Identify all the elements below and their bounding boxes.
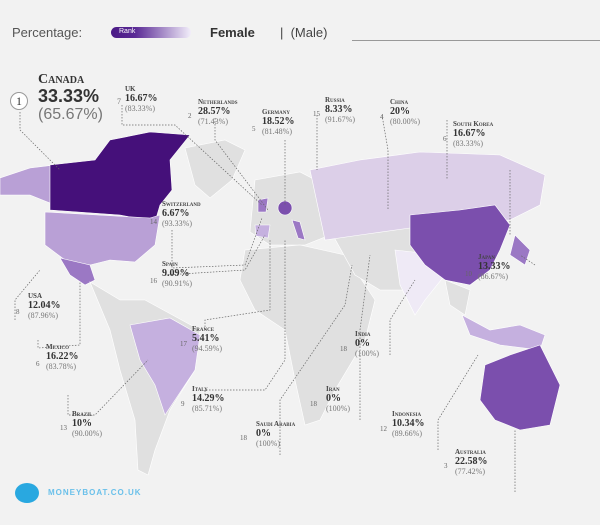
legend: Percentage:	[12, 25, 82, 40]
label: Brazil: 10%	[72, 418, 92, 429]
legend: | (Male)	[280, 25, 327, 40]
India	[395, 250, 445, 315]
text: 3	[444, 462, 448, 470]
text: 18	[340, 345, 347, 353]
label: France: (94.59%)	[192, 344, 222, 353]
Australia	[480, 345, 560, 430]
label: Canada: 1	[16, 94, 22, 108]
label: Germany: (81.48%)	[262, 127, 292, 136]
label: Switzerland	[162, 200, 201, 228]
label: India: (100%)	[355, 349, 379, 358]
label: Brazil	[72, 410, 102, 438]
text: 2	[188, 112, 192, 120]
label: Germany: 18.52%	[262, 116, 294, 127]
label: Russia	[325, 96, 355, 124]
label: Iran: 0%	[326, 393, 341, 404]
text: 14	[150, 218, 157, 226]
label: France	[192, 325, 222, 353]
label: Iran: Iran	[326, 385, 340, 393]
label: Iran	[326, 385, 350, 413]
label: Mexico: 16.22%	[46, 351, 78, 362]
label: China	[390, 98, 420, 126]
text: 5	[252, 125, 256, 133]
text: 15	[313, 110, 320, 118]
label: Switzerland: 6.67%	[162, 208, 190, 219]
label: Switzerland: Switzerland	[162, 200, 201, 208]
Russia	[310, 152, 545, 240]
label: China: 20%	[390, 106, 410, 117]
label: Italy: (85.71%)	[192, 404, 222, 413]
label: Japan: 13.33%	[478, 261, 510, 272]
label: Canada: Canada	[38, 72, 84, 87]
label: Netherlands: Netherlands	[198, 98, 238, 106]
label: South Korea	[453, 120, 494, 148]
Spain	[255, 225, 270, 238]
label: Russia: (91.67%)	[325, 115, 355, 124]
label: Netherlands: (71.43%)	[198, 117, 228, 126]
label: South Korea: South Korea	[453, 120, 493, 128]
label: India: 0%	[355, 338, 370, 349]
label: UK: UK	[125, 85, 136, 93]
Japan	[510, 235, 530, 265]
Middle East / Asia grey	[330, 225, 440, 290]
label: UK: 16.67%	[125, 93, 158, 104]
text: 6	[443, 135, 446, 143]
label: Brazil: Brazil	[72, 410, 93, 418]
label: South Korea: 16.67%	[453, 128, 486, 139]
UK	[258, 198, 268, 212]
label: Russia: 8.33%	[325, 104, 352, 115]
label: India	[355, 330, 379, 358]
SE Asia grey	[445, 280, 470, 315]
label: Netherlands	[198, 98, 238, 126]
label: Russia: Russia	[325, 96, 345, 104]
Greenland	[185, 140, 245, 198]
legend: Female	[210, 25, 255, 40]
text: 8	[16, 308, 20, 316]
text: 13	[60, 424, 67, 432]
label: India: India	[355, 330, 371, 338]
label: China: China	[390, 98, 408, 106]
USA	[45, 212, 160, 265]
text: 16	[150, 277, 157, 285]
Germany	[278, 201, 292, 215]
label: Saudi Arabia	[256, 420, 296, 448]
label: Saudi Arabia: (100%)	[256, 439, 280, 448]
label: Indonesia: (89.66%)	[392, 429, 422, 438]
label: Spain: (90.91%)	[162, 279, 192, 288]
label: USA	[28, 292, 60, 320]
Canada	[50, 132, 190, 222]
label: Canada: (65.67%)	[38, 106, 103, 123]
label: Brazil: (90.00%)	[72, 429, 102, 438]
label: Spain: 9.09%	[162, 268, 190, 279]
label: Australia: Australia	[455, 448, 486, 456]
label: USA: USA	[28, 292, 42, 300]
label: Mexico: (83.78%)	[46, 362, 76, 371]
label: France: France	[192, 325, 214, 333]
label: Mexico	[46, 343, 78, 371]
Alaska	[0, 165, 55, 205]
text: 6	[36, 360, 40, 368]
label: Canada: 33.33%	[38, 86, 99, 106]
label: Australia: (77.42%)	[455, 467, 485, 476]
text: 10	[465, 270, 472, 278]
label: Iran: (100%)	[326, 404, 350, 413]
label: Spain	[162, 260, 192, 288]
label: Italy: 14.29%	[192, 393, 224, 404]
label: Italy	[192, 385, 224, 413]
text: 4	[380, 113, 384, 121]
Africa	[240, 245, 375, 425]
Indonesia	[462, 315, 545, 350]
label: Indonesia: Indonesia	[392, 410, 421, 418]
label: Indonesia	[392, 410, 424, 438]
text: 12	[380, 425, 387, 433]
label: UK: (83.33%)	[125, 104, 155, 113]
Brazil	[130, 318, 200, 415]
label: China: (80.00%)	[390, 117, 420, 126]
text: 17	[180, 340, 187, 348]
label: Japan: Japan	[478, 253, 495, 261]
China	[410, 205, 510, 285]
Central / South America	[90, 282, 200, 475]
logo	[15, 483, 142, 503]
label: Spain: Spain	[162, 260, 178, 268]
label: Japan	[478, 253, 510, 281]
label: Italy: Italy	[192, 385, 208, 393]
label: Japan: (86.67%)	[478, 272, 508, 281]
Europe	[250, 172, 330, 245]
label: UK	[117, 85, 158, 113]
label: Indonesia: 10.34%	[392, 418, 424, 429]
label: Germany: Germany	[262, 108, 290, 116]
text: 7	[117, 97, 121, 106]
label: South Korea: (83.33%)	[453, 139, 483, 148]
label: France: 5.41%	[192, 333, 220, 344]
text: 18	[310, 400, 317, 408]
label: Switzerland: (93.33%)	[162, 219, 192, 228]
logo: MONEYBOAT.CO.UK	[48, 488, 142, 497]
legend	[12, 25, 600, 41]
label: Saudi Arabia: 0%	[256, 428, 271, 439]
label: Australia	[455, 448, 488, 476]
text: 18	[240, 434, 247, 442]
Mexico	[60, 258, 95, 285]
label: Australia: 22.58%	[455, 456, 488, 467]
label: USA: (87.96%)	[28, 311, 58, 320]
label: Netherlands: 28.57%	[198, 106, 230, 117]
label: USA: 12.04%	[28, 300, 60, 311]
label: Saudi Arabia: Saudi Arabia	[256, 420, 295, 428]
label: Germany	[262, 108, 294, 136]
legend: Rank	[119, 28, 135, 35]
text: 9	[181, 400, 184, 408]
Italy	[292, 220, 305, 240]
label: Canada	[10, 72, 103, 123]
label: Mexico: Mexico	[46, 343, 69, 351]
